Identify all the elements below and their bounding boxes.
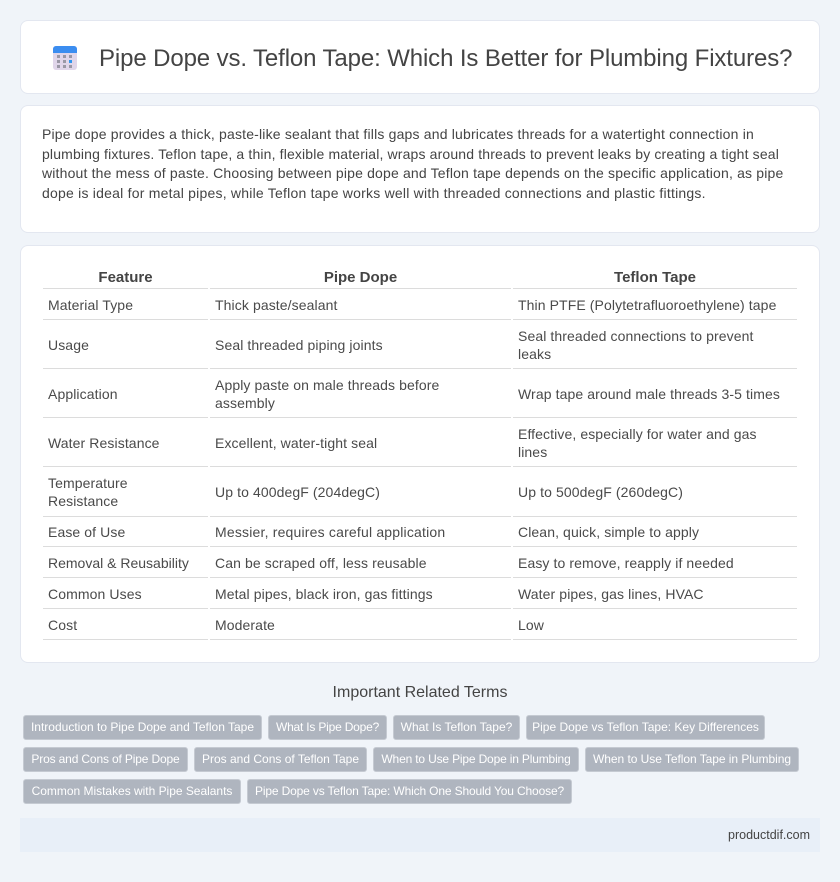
intro paragraph: without the mess of paste. Choosing between pipe dope and Teflon tape depends on the specific application, as pipe — [42, 165, 783, 181]
tag: What Is Pipe Dope? — [276, 720, 379, 734]
row: water resistance: Excellent, water-tight seal — [215, 435, 377, 451]
intro paragraph: plumbing fixtures. Teflon tape, a thin, flexible material, wraps around threads to prevent leaks by creating a tight seal — [42, 146, 779, 162]
related terms heading: Important Related Terms — [333, 684, 507, 701]
tag: Introduction to Pipe Dope and Teflon Tape — [31, 720, 254, 734]
row: common uses: Metal pipes, black iron, gas fittings — [215, 586, 433, 602]
row: water resistance: lines — [518, 444, 547, 460]
row: material type: Thick paste/sealant — [215, 297, 338, 313]
tag — [268, 715, 387, 740]
row: common uses: Common Uses — [48, 586, 142, 602]
tag: Pros and Cons of Teflon Tape — [202, 752, 359, 766]
row: water resistance: Water Resistance — [48, 435, 160, 451]
row: temperature resistance: Resistance — [48, 493, 118, 509]
tag — [585, 747, 799, 772]
row: application — [48, 377, 780, 411]
tag: Pipe Dope vs Teflon Tape: Key Differences — [532, 720, 759, 734]
row: application: Apply paste on male threads before — [215, 377, 439, 393]
tag — [23, 779, 241, 804]
row: usage: Seal threaded piping joints — [215, 337, 383, 353]
row: removal and reusability — [48, 555, 734, 571]
row: usage: Usage — [48, 337, 89, 353]
row: temperature resistance — [48, 475, 683, 509]
intro text panel — [20, 105, 820, 233]
comparison table panel — [20, 245, 820, 663]
row: application: Wrap tape around male threads 3-5 times — [518, 386, 780, 402]
tag: Common Mistakes with Pipe Sealants — [32, 784, 232, 798]
comparison table — [43, 269, 797, 640]
row: ease of use — [48, 524, 699, 540]
row: application: assembly — [215, 395, 275, 411]
row: ease of use: Messier, requires careful application — [215, 524, 445, 540]
row: temperature resistance: Temperature — [48, 475, 128, 491]
row: temperature resistance: Up to 500degF (260degC) — [518, 484, 683, 500]
row: usage: Seal threaded connections to prevent — [518, 328, 754, 344]
related term tags — [23, 715, 799, 804]
source credit: productdif.com — [728, 828, 810, 842]
intro paragraph: Pipe dope provides a thick, paste-like sealant that fills gaps and lubricates threads for a watertight connection in — [42, 126, 754, 142]
row: removal and reusability: Can be scraped off, less reusable — [215, 555, 427, 571]
tag: When to Use Pipe Dope in Plumbing — [381, 752, 571, 766]
icon: calendar — [53, 46, 77, 70]
tag: Pipe Dope vs Teflon Tape: Which One Should You Choose? — [255, 784, 564, 798]
table header: Teflon Tape — [614, 269, 696, 286]
row: usage: leaks — [518, 346, 551, 362]
row: cost: Moderate — [215, 617, 275, 633]
tag: Pros and Cons of Pipe Dope — [31, 752, 180, 766]
row: common uses: Water pipes, gas lines, HVAC — [518, 586, 704, 602]
row: temperature resistance: Up to 400degF (204degC) — [215, 484, 380, 500]
row: material type — [48, 297, 776, 313]
tag: When to Use Teflon Tape in Plumbing — [593, 752, 791, 766]
row: removal and reusability: Easy to remove, reapply if needed — [518, 555, 734, 571]
intro paragraph: dope is ideal for metal pipes, while Teflon tape works well with threaded connections and plastic fittings. — [42, 184, 706, 200]
row: cost: Low — [518, 617, 544, 633]
table header: Feature — [98, 269, 153, 286]
tag — [393, 715, 520, 740]
tag — [526, 715, 765, 740]
row: cost — [48, 617, 544, 633]
intro paragraph — [42, 126, 783, 201]
row: common uses — [48, 586, 704, 602]
tag — [247, 779, 572, 804]
row: usage — [48, 328, 754, 362]
title: Pipe Dope vs. Teflon Tape: Which Is Better for Plumbing Fixtures? — [99, 45, 792, 72]
table header: Pipe Dope — [324, 269, 397, 286]
tag — [373, 747, 579, 772]
row: material type: Material Type — [48, 297, 133, 313]
row: ease of use: Ease of Use — [48, 524, 125, 540]
row: application: Application — [48, 386, 118, 402]
tag: What Is Teflon Tape? — [401, 720, 512, 734]
table header — [98, 269, 696, 286]
footer bar — [20, 818, 820, 852]
tag — [23, 715, 262, 740]
tag — [23, 747, 188, 772]
row: cost: Cost — [48, 617, 77, 633]
row: ease of use: Clean, quick, simple to apply — [518, 524, 699, 540]
row: water resistance — [48, 426, 757, 460]
header panel — [20, 20, 820, 94]
row: water resistance: Effective, especially for water and gas — [518, 426, 757, 442]
tag — [194, 747, 367, 772]
row: removal and reusability: Removal & Reusability — [48, 555, 189, 571]
row: material type: Thin PTFE (Polytetrafluoroethylene) tape — [518, 297, 776, 313]
